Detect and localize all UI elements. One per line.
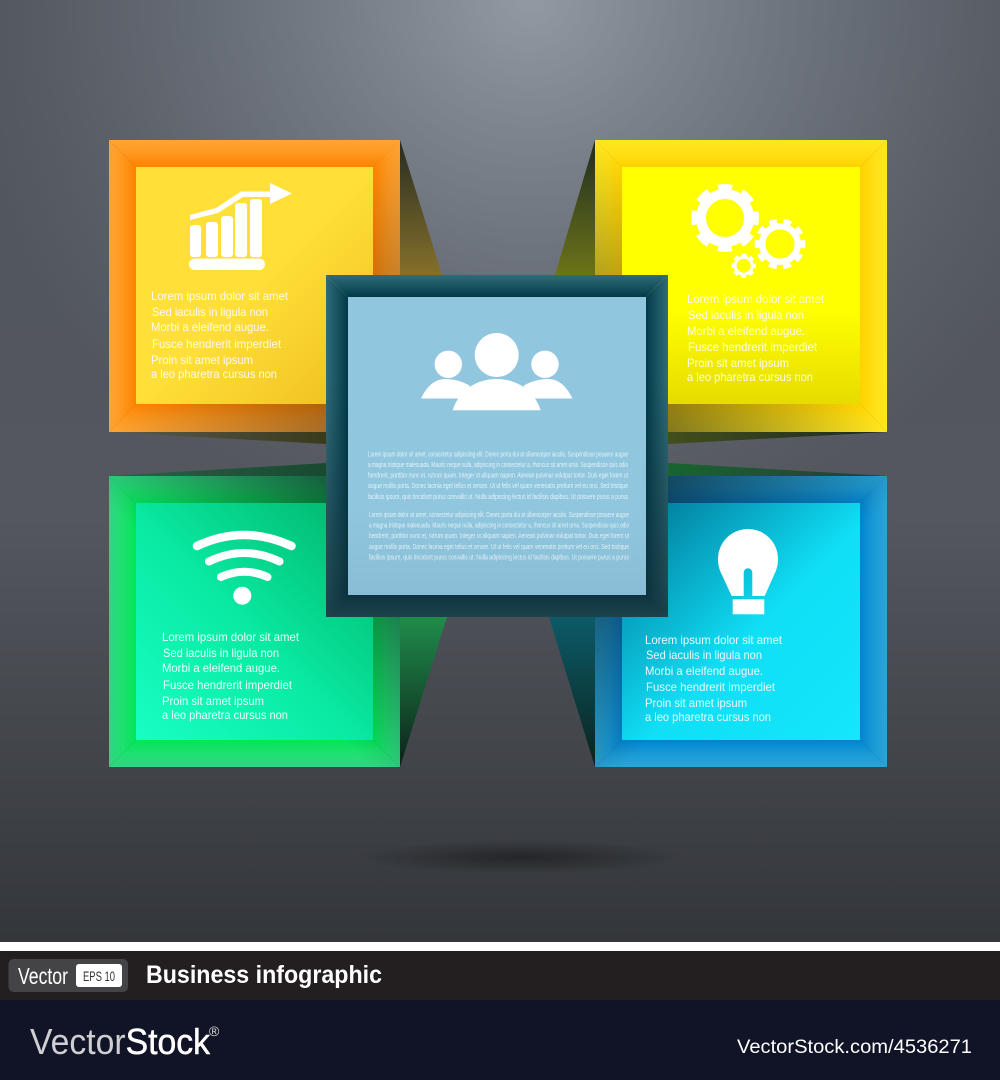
text: blue panel list: a leo pharetra cursus non xyxy=(645,710,771,724)
panel: yellow gears xyxy=(595,140,887,432)
footer bar xyxy=(0,1000,1000,1080)
text: yellow panel list: Sed iaculis in ligula non xyxy=(688,308,804,322)
icon: lightbulb xyxy=(718,529,778,614)
text: blue panel list: Fusce hendrerit imperdiet xyxy=(646,680,776,694)
text: green panel list: Fusce hendrerit imperdiet xyxy=(163,678,293,692)
panel: centre team xyxy=(326,275,668,617)
logo: registered mark: ® xyxy=(209,1023,220,1039)
text: centre paragraph two: a magna tristique malesuada. Mauris neque nulla, adipiscing in consectetur a, rhoncus sit amet urna. Suspendisse quis odio xyxy=(369,520,629,530)
floor shadow xyxy=(355,840,685,874)
text: blue panel list: Proin sit amet ipsum xyxy=(645,696,747,710)
text: centre paragraph one: hendrerit, porttitor nunc et, rutrum quam. Integer ut aliquam sapien. Aenean pulvinar volutpat tortor. Duis eget lorem ut xyxy=(368,470,629,480)
text: orange panel list: Lorem ipsum dolor sit amet xyxy=(151,289,289,303)
connecting flaps xyxy=(109,140,887,767)
text: centre paragraph two: augue mollis porta. Donec lacinia eget tellus et ornare. Ut ut felis vel quam venenatis pretium vel eu orci. Sed tristique xyxy=(369,542,629,551)
icon: three people xyxy=(421,333,572,410)
text: yellow panel list: Lorem ipsum dolor sit amet xyxy=(687,292,825,306)
panel: green wifi xyxy=(109,476,400,767)
text: green panel list xyxy=(162,630,300,722)
text: green panel list: Proin sit amet ipsum xyxy=(162,694,264,708)
text: blue panel list: Sed iaculis in ligula non xyxy=(646,648,762,662)
text: green panel list: Morbi a eleifend augue. xyxy=(162,661,280,675)
text: centre paragraph two xyxy=(369,510,630,562)
badge: vector eps 10 xyxy=(8,959,128,992)
text: blue panel list xyxy=(645,633,783,724)
text: orange panel list: a leo pharetra cursus non xyxy=(151,367,277,381)
text: yellow panel list: Proin sit amet ipsum xyxy=(687,356,789,370)
text: centre paragraph one: Lorem ipsum dolor sit amet, consectetur adipiscing elit. Donec porta dui at ullamcorper iaculis. Suspendisse posuere augue xyxy=(368,450,628,458)
text: green panel list: a leo pharetra cursus non xyxy=(162,708,288,722)
image id: VectorStock.com/4536271 xyxy=(737,1037,972,1058)
text: orange panel list: Fusce hendrerit imperdiet xyxy=(152,337,282,351)
badge: vector eps 10: EPS 10 xyxy=(83,968,115,984)
text: centre paragraph two: Lorem ipsum dolor sit amet, consectetur adipiscing elit. Donec porta dui at ullamcorper iaculis. Suspendisse posuere augue xyxy=(369,510,629,519)
icon: gears xyxy=(694,187,803,277)
text: orange panel list: Morbi a eleifend augue. xyxy=(151,320,269,334)
text: centre paragraph one: augue mollis porta. Donec lacinia eget tellus et ornare. Ut ut felis vel quam venenatis pretium vel eu orci. Sed tristique xyxy=(368,481,628,490)
text: orange panel list: Proin sit amet ipsum xyxy=(151,353,253,367)
text: yellow panel list xyxy=(687,292,825,384)
text: blue panel list: Morbi a eleifend augue. xyxy=(645,664,763,678)
text: orange panel list: Sed iaculis in ligula non xyxy=(152,305,268,319)
icon: bar chart with arrow xyxy=(189,183,292,270)
logo: vectorstock: VectorStock xyxy=(30,1021,211,1062)
white divider band xyxy=(0,942,1000,951)
text: green panel list: Sed iaculis in ligula non xyxy=(163,646,279,660)
text: yellow panel list: Fusce hendrerit imperdiet xyxy=(688,340,818,354)
heading: Business infographic xyxy=(146,961,382,989)
badge: vector eps 10: Vector xyxy=(18,963,68,989)
text: centre paragraph two: facilisis ipsum, quis tincidunt purus convallis ut. Nulla adipiscing lectus id facilisis dapibus. Ut posuere purus a purus xyxy=(369,552,629,562)
panel: orange growth chart xyxy=(109,140,400,432)
text: centre paragraph two: hendrerit, porttitor nunc et, rutrum quam. Integer ut aliquam sapien. Aenean pulvinar volutpat tortor. Duis eget lorem ut xyxy=(369,531,630,540)
text: centre paragraph one: facilisis ipsum, quis tincidunt purus convallis ut. Nulla adipiscing lectus id facilisis dapibus. Ut posuere purus a purus xyxy=(368,492,628,501)
icon: wifi xyxy=(197,535,292,605)
text: blue panel list: Lorem ipsum dolor sit amet xyxy=(645,633,783,647)
text: green panel list: Lorem ipsum dolor sit amet xyxy=(162,630,300,644)
title bar xyxy=(0,951,1000,1000)
text: centre paragraph one: a magna tristique malesuada. Mauris neque nulla, adipiscing in consectetur a, rhoncus sit amet urna. Suspendisse quis odio xyxy=(368,460,628,469)
text: yellow panel list: Morbi a eleifend augue. xyxy=(687,324,805,338)
panel: blue lightbulb xyxy=(595,476,887,767)
text: centre paragraph one xyxy=(368,450,629,501)
text: orange panel list xyxy=(151,289,289,381)
text: yellow panel list: a leo pharetra cursus non xyxy=(687,370,813,384)
